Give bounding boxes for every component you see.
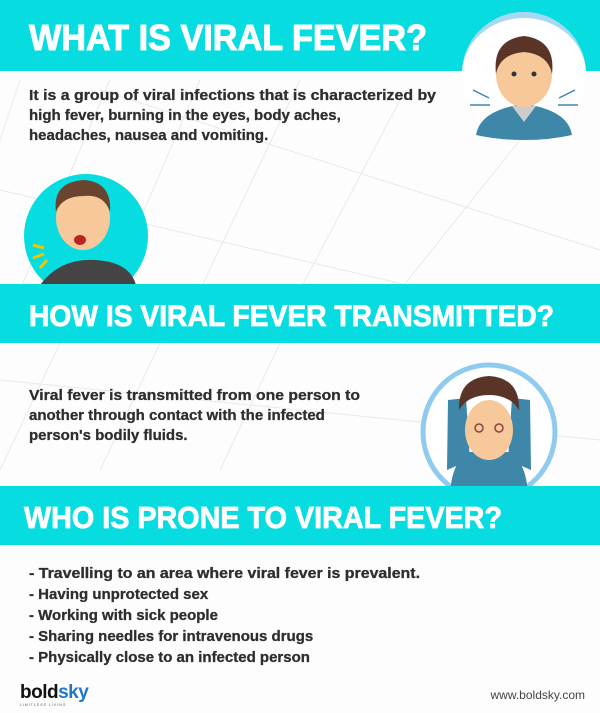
text: website: www.boldsky.com xyxy=(490,688,585,702)
list: risk factors: - Travelling to an area where viral fever is prevalent. xyxy=(29,565,420,582)
icon: feverish man xyxy=(462,12,586,140)
text: transmission: person's bodily fluids. xyxy=(29,427,188,444)
list: risk factors: - Sharing needles for intravenous drugs xyxy=(29,628,313,645)
list: risk factors: - Physically close to an infected person xyxy=(29,649,310,666)
icon: dizzy man xyxy=(423,365,555,499)
title: prone: WHO IS PRONE TO VIRAL FEVER? xyxy=(24,500,502,535)
text: definition xyxy=(29,87,437,144)
title: transmission: HOW IS VIRAL FEVER TRANSMITTED? xyxy=(29,300,554,333)
list: risk factors xyxy=(29,565,420,666)
list: risk factors: - Working with sick people xyxy=(29,607,218,624)
text: transmission: Viral fever is transmitted from one person to xyxy=(29,387,360,404)
text: definition: high fever, burning in the eyes, body aches, xyxy=(29,107,341,124)
logo: boldsky: LIMITLESS LIVING xyxy=(20,703,66,707)
text: transmission xyxy=(29,387,360,444)
title: what is viral fever: WHAT IS VIRAL FEVER? xyxy=(29,17,427,58)
text: definition: It is a group of viral infections that is characterized by xyxy=(29,87,437,104)
logo: boldsky: boldsky xyxy=(20,682,89,703)
band: what is viral fever xyxy=(0,0,600,71)
text: definition: headaches, nausea and vomiting. xyxy=(29,127,268,144)
icon: coughing man xyxy=(24,174,148,298)
band: how is viral fever transmitted xyxy=(0,284,600,343)
text: transmission: another through contact with the infected xyxy=(29,407,325,424)
list: risk factors: - Having unprotected sex xyxy=(29,586,209,603)
band: who is prone xyxy=(0,486,600,545)
